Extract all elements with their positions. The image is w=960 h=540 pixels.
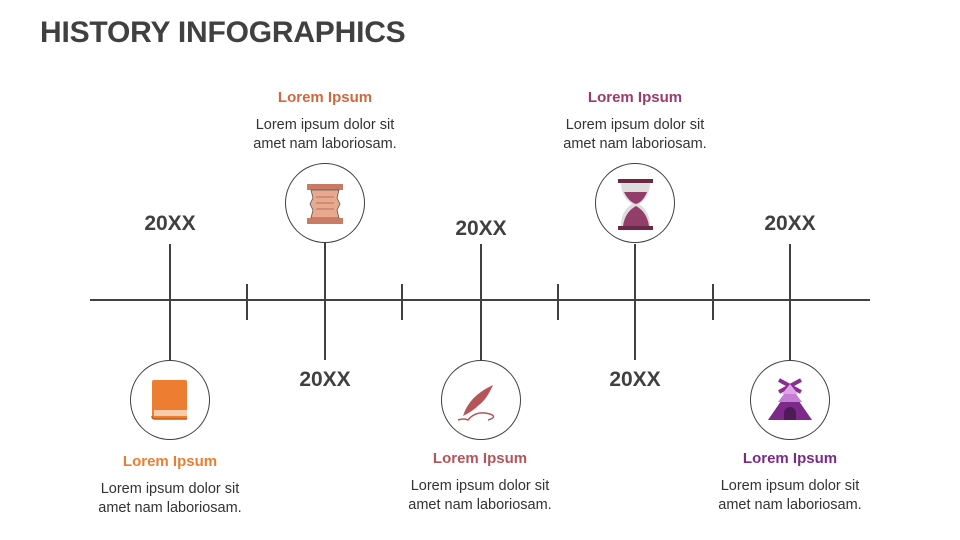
text block 1: amet nam laboriosam. bbox=[98, 500, 242, 516]
text block 2 bbox=[253, 89, 397, 152]
text block 2: amet nam laboriosam. bbox=[253, 136, 397, 152]
text block 1: Lorem ipsum dolor sit bbox=[101, 481, 239, 497]
text block 4: Lorem Ipsum bbox=[588, 89, 682, 106]
text block 5 bbox=[718, 450, 862, 513]
text block 5: Lorem ipsum dolor sit bbox=[721, 478, 859, 494]
text block 2: Lorem ipsum dolor sit bbox=[256, 117, 394, 133]
text block 1 bbox=[98, 453, 242, 516]
text block 3: amet nam laboriosam. bbox=[408, 497, 552, 513]
icon: hourglass bbox=[618, 179, 653, 230]
text block 3 bbox=[408, 450, 552, 513]
text block 5: Lorem Ipsum bbox=[743, 450, 837, 467]
year 1: 20XX bbox=[144, 212, 196, 235]
text block 4: Lorem ipsum dolor sit bbox=[566, 117, 704, 133]
title: HISTORY INFOGRAPHICS bbox=[40, 16, 406, 49]
year 4: 20XX bbox=[609, 368, 661, 391]
text block 5: amet nam laboriosam. bbox=[718, 497, 862, 513]
text block 1: Lorem Ipsum bbox=[123, 453, 217, 470]
year 3: 20XX bbox=[455, 217, 507, 240]
icon: feather bbox=[458, 385, 494, 420]
icon: scroll bbox=[307, 184, 343, 224]
text block 3: Lorem Ipsum bbox=[433, 450, 527, 467]
text block 4: amet nam laboriosam. bbox=[563, 136, 707, 152]
year 2: 20XX bbox=[299, 368, 351, 391]
icon: tent bbox=[768, 380, 812, 420]
text block 2: Lorem Ipsum bbox=[278, 89, 372, 106]
text block 4 bbox=[563, 89, 707, 152]
year 5: 20XX bbox=[764, 212, 816, 235]
text block 3: Lorem ipsum dolor sit bbox=[411, 478, 549, 494]
icon: book bbox=[152, 380, 187, 419]
